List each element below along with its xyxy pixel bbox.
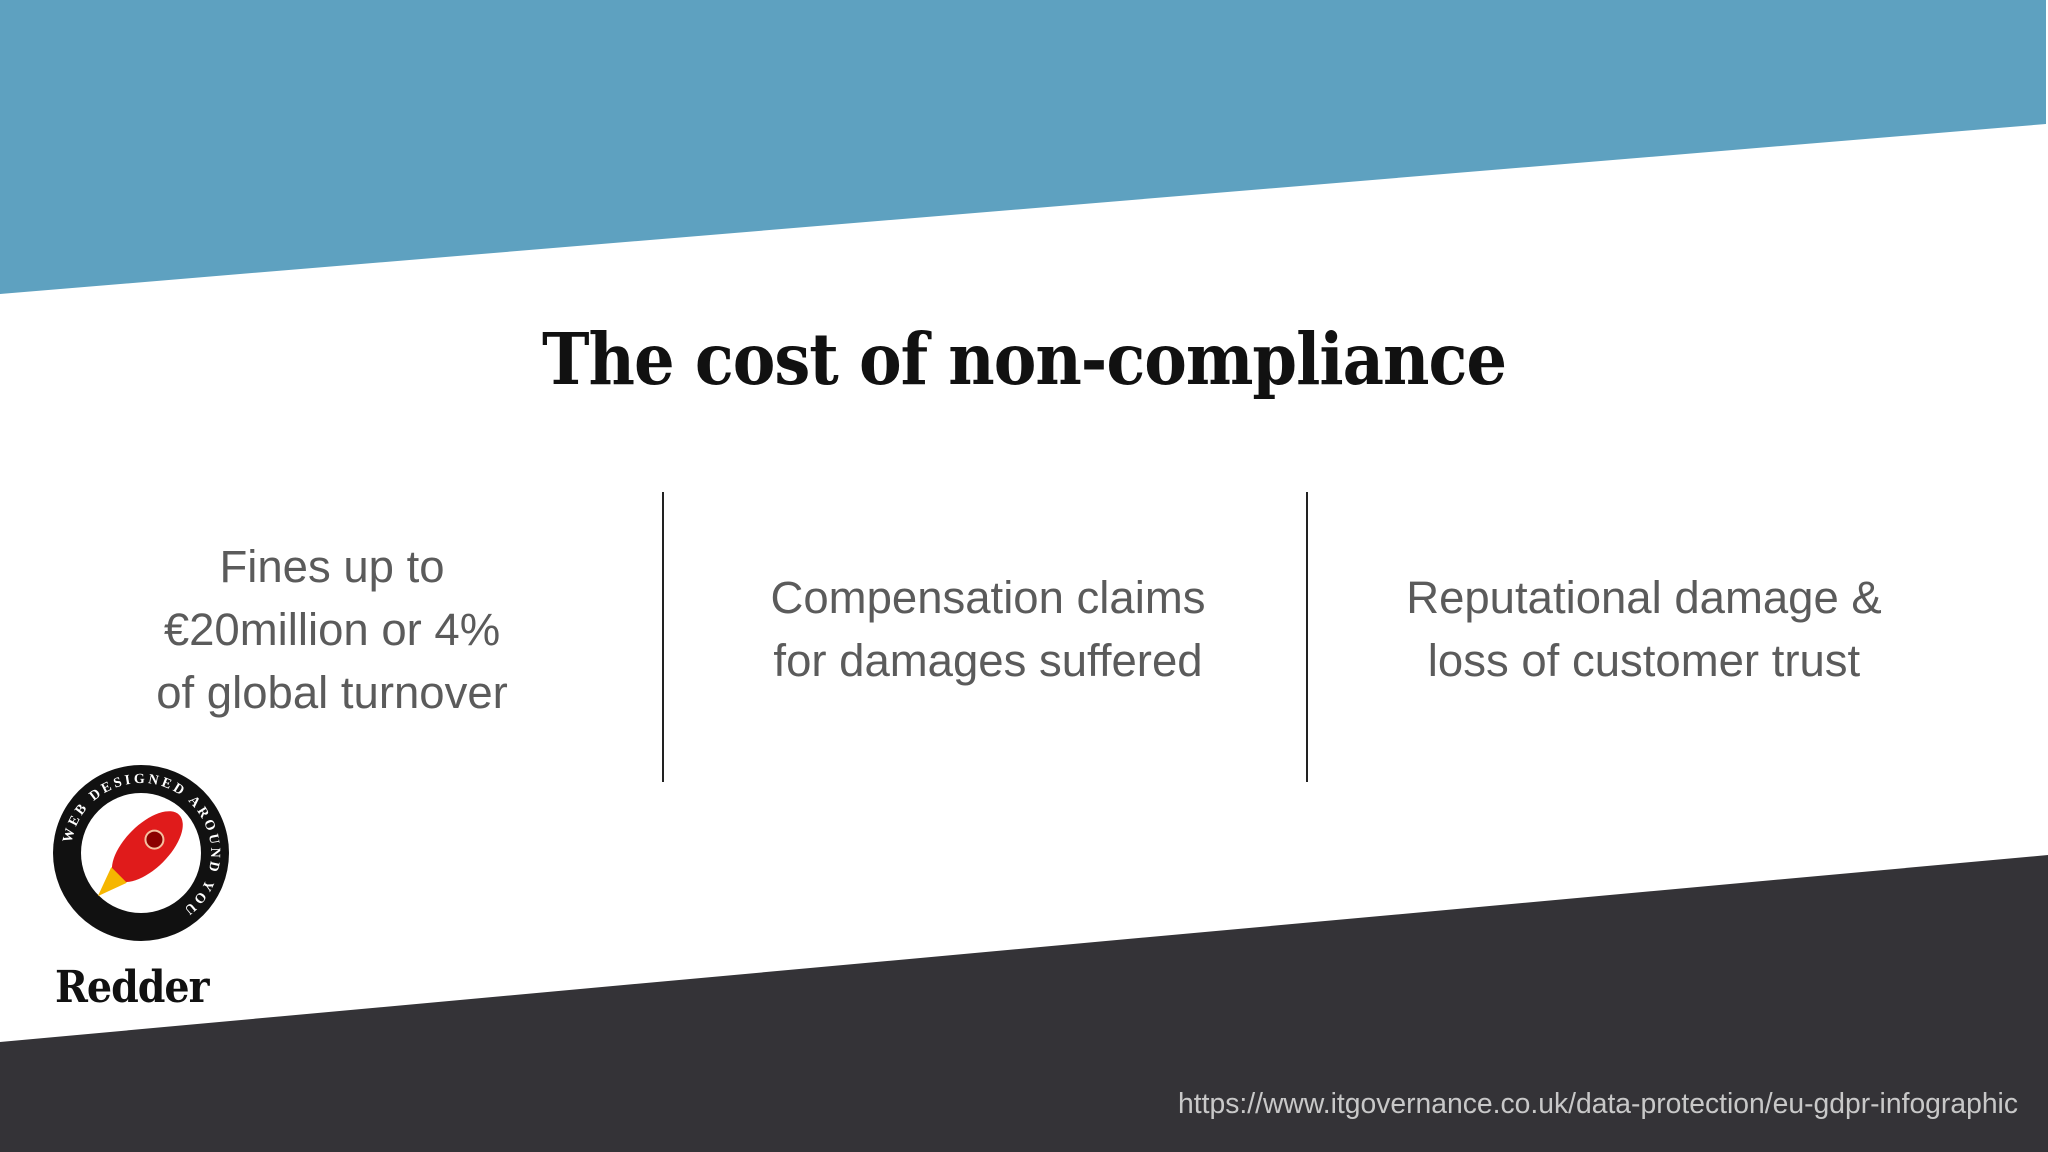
column: fines: €20million or 4% bbox=[164, 604, 500, 655]
brand name: Redder bbox=[55, 962, 208, 1013]
column: fines: of global turnover bbox=[156, 667, 508, 718]
source url: https://www.itgovernance.co.uk/data-protection/eu-gdpr-infographic bbox=[1178, 1087, 2018, 1119]
column: reputation: loss of customer trust bbox=[1428, 635, 1860, 686]
column: reputation: Reputational damage & bbox=[1406, 572, 1882, 623]
column: compensation: Compensation claims bbox=[771, 572, 1205, 623]
column: compensation: for damages suffered bbox=[773, 635, 1203, 686]
column: compensation bbox=[771, 572, 1205, 686]
divider 2 bbox=[1306, 492, 1308, 782]
divider 1 bbox=[662, 492, 664, 782]
title: The cost of non-compliance bbox=[542, 317, 1506, 401]
column: fines bbox=[156, 541, 508, 718]
column: fines: Fines up to bbox=[219, 541, 445, 592]
column: reputation bbox=[1406, 572, 1882, 686]
